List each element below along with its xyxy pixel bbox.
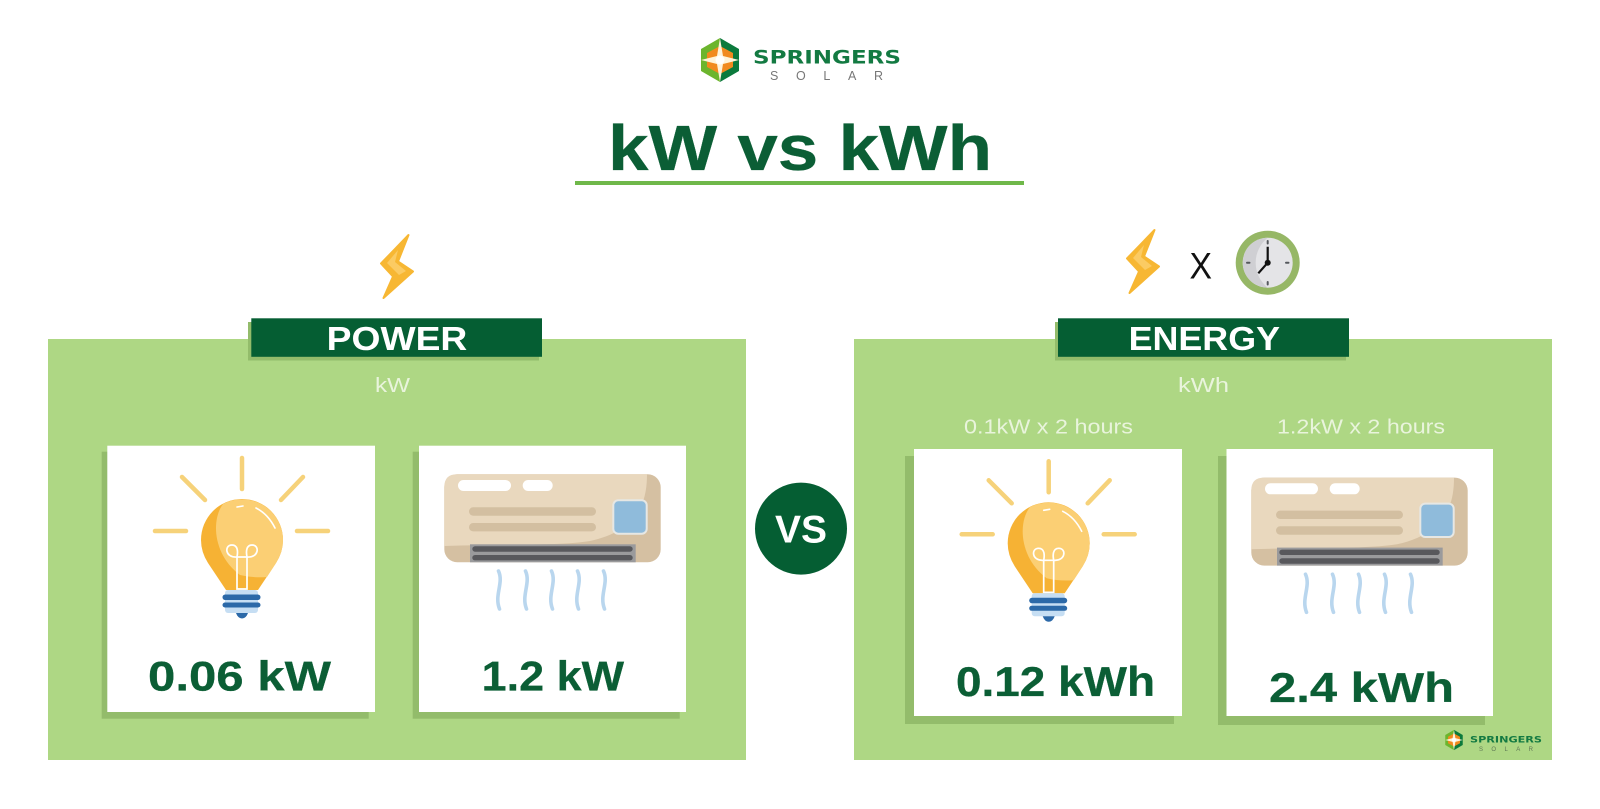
vs badge: VS	[775, 508, 827, 552]
heading: energy	[1055, 318, 1349, 360]
watermark logo: SOLAR	[1479, 747, 1534, 753]
unit label: kWh: kWh	[1178, 375, 1229, 397]
card: air conditioner 2.4 kWh	[1218, 449, 1493, 725]
watermark logo: SPRINGERS	[1470, 736, 1542, 746]
icon: lightning bolt	[381, 235, 413, 298]
heading: power: POWER	[327, 320, 467, 357]
card: light bulb 0.06 kW: 0.06 kW	[148, 653, 331, 700]
formula: air conditioner: 1.2kW x 2 hours	[1277, 416, 1445, 438]
card: light bulb 0.12 kWh	[905, 449, 1182, 724]
icon: lightning bolt times clock	[1127, 230, 1300, 295]
formula: bulb: 0.1kW x 2 hours	[964, 416, 1133, 438]
vs badge	[755, 483, 847, 575]
card: light bulb 0.12 kWh: 0.12 kWh	[956, 658, 1155, 705]
card: air conditioner 1.2 kW	[413, 446, 686, 719]
card: air conditioner 2.4 kWh: 2.4 kWh	[1269, 664, 1454, 711]
card: air conditioner 1.2 kW: 1.2 kW	[482, 653, 624, 700]
logo: Springers Solar: SPRINGERS	[753, 46, 901, 68]
heading: power	[248, 318, 542, 360]
logo: Springers Solar: SOLAR	[770, 69, 883, 83]
panel: power	[48, 318, 746, 760]
card: light bulb 0.06 kW	[102, 446, 375, 719]
watermark logo	[1445, 730, 1542, 753]
title: kW vs kWh	[608, 112, 992, 184]
unit label: kW: kW	[375, 375, 410, 397]
heading: energy: ENERGY	[1129, 320, 1280, 357]
icon: lightning bolt times clock: X	[1190, 246, 1212, 286]
logo: Springers Solar	[701, 38, 901, 83]
panel: energy	[854, 318, 1552, 760]
